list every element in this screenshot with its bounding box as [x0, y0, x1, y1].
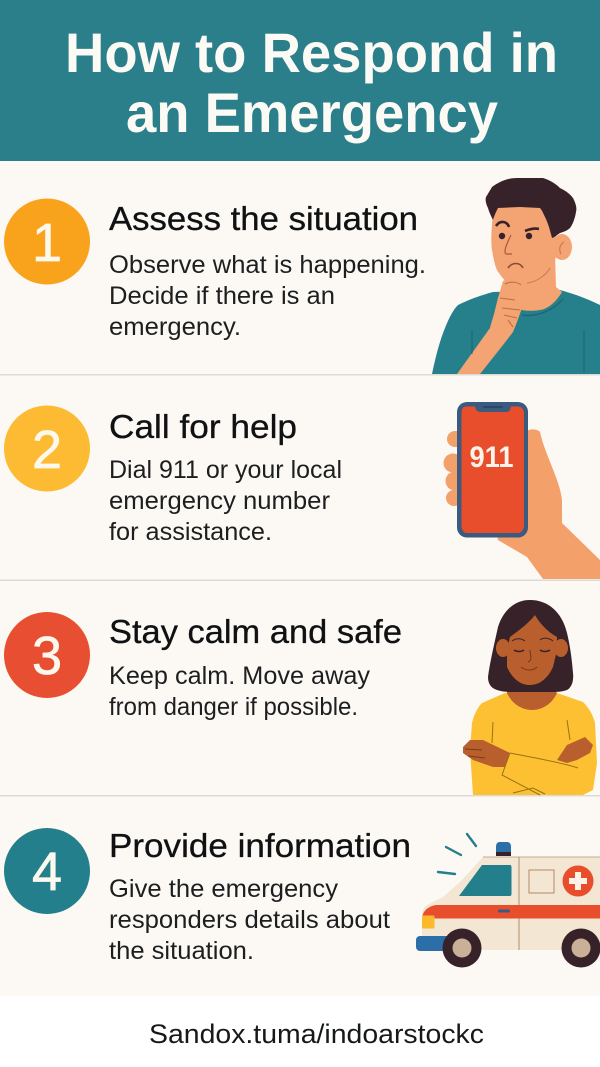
step 1 text: Decide if there is an	[109, 282, 335, 310]
step 1 text: emergency.	[109, 313, 241, 341]
footer source text: Sandox.tuma/indoarstockc	[149, 1019, 484, 1049]
step 3 panel	[4, 600, 597, 795]
step 2 number badge	[4, 406, 90, 492]
step 2 number badge: 2	[32, 420, 62, 480]
step 3 text: Keep calm. Move away	[109, 662, 370, 690]
step 1 text	[109, 251, 426, 341]
step 2 text	[109, 456, 342, 546]
step 3 heading: Stay calm and safe	[109, 613, 402, 650]
title banner	[0, 0, 600, 161]
step 2 text: for assistance.	[109, 518, 272, 546]
step 3 text	[109, 662, 370, 721]
icon: hand holding phone	[444, 402, 600, 579]
step 4 number badge	[4, 828, 90, 914]
step 2 heading: Call for help	[109, 408, 297, 445]
step 4 text: the situation.	[109, 937, 254, 965]
step 1 number badge: 1	[32, 213, 62, 273]
step 4 panel	[4, 827, 600, 968]
icon: ambulance	[416, 834, 600, 968]
title banner: an Emergency	[126, 81, 498, 144]
icon: thinking man	[432, 178, 600, 374]
step 4 text: responders details about	[109, 906, 390, 934]
step 4 heading: Provide information	[109, 827, 411, 864]
step 4 text	[109, 875, 390, 965]
step 2 text: emergency number	[109, 487, 330, 515]
step 1 text: Observe what is happening.	[109, 251, 426, 279]
step 1 number badge	[4, 198, 90, 284]
step 2 panel	[4, 402, 600, 579]
step 4 number badge: 4	[32, 842, 62, 902]
step 3 number badge	[4, 612, 90, 698]
step 1 panel	[4, 178, 600, 374]
step 2 text: Dial 911 or your local	[109, 456, 342, 484]
icon: hand holding phone: 911	[470, 441, 514, 474]
title banner: How to Respond in	[65, 21, 558, 84]
step 1 heading: Assess the situation	[109, 200, 418, 237]
step 3 text: from danger if possible.	[109, 693, 358, 721]
step 4 text: Give the emergency	[109, 875, 339, 903]
icon: calm woman with crossed arms	[463, 600, 597, 795]
step 3 number badge: 3	[32, 626, 62, 686]
